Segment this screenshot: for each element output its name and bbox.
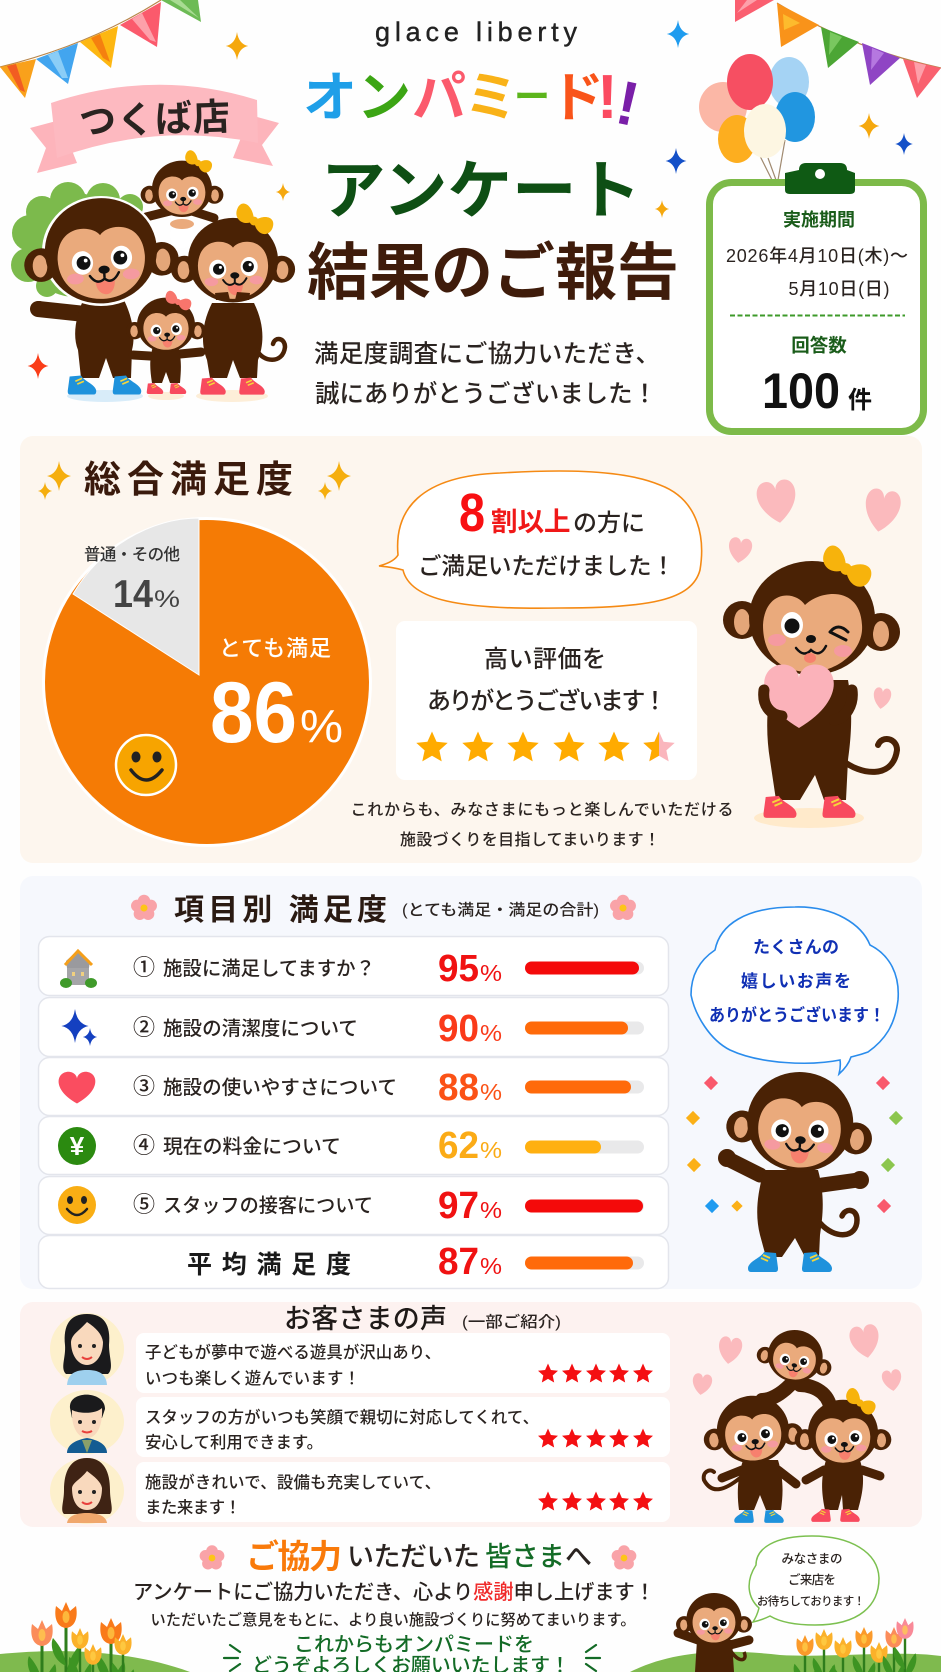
hearts xyxy=(727,478,903,710)
left monkey xyxy=(701,1392,805,1523)
row 4: % xyxy=(480,1137,502,1163)
review card 2: スタッフの方がいつも笑顔で親切に対応してくれて、 xyxy=(145,1408,539,1427)
footer closing xyxy=(252,1633,570,1672)
footer heading: ご協力 xyxy=(246,1538,342,1575)
speech bubble: welcome: お待ちしております！ xyxy=(757,1594,865,1608)
speech bubble: thanks xyxy=(691,907,898,1074)
closing message: 施設づくりを目指してまいります！ xyxy=(400,831,660,849)
icon: yen coin: ¥ xyxy=(70,1131,85,1161)
row 5: 97 xyxy=(438,1185,479,1227)
row 1: ① xyxy=(133,955,155,980)
monkeys: trio xyxy=(701,1323,891,1523)
footer heading: へ xyxy=(565,1542,592,1572)
review card 1 xyxy=(136,1333,670,1393)
footer note: いただいたご意見をもとに、より良い施設づくりに努めてまいります。 xyxy=(150,1611,636,1629)
row 5: % xyxy=(480,1197,502,1223)
review card 3: また来ます！ xyxy=(145,1499,241,1517)
row 3: 施設の使いやすさについて xyxy=(163,1077,397,1099)
bush xyxy=(11,182,143,297)
responses count: 件 xyxy=(848,387,872,414)
logo: オンパミード!! xyxy=(303,63,645,140)
label: other: 普通・その他 xyxy=(84,545,180,564)
monkey: top small xyxy=(141,149,223,248)
monkey: cheering with blue shoes xyxy=(718,1065,878,1272)
hearts xyxy=(691,1323,903,1396)
shadows xyxy=(67,390,143,402)
row 3: 88 xyxy=(438,1067,479,1109)
heading sparkles xyxy=(38,461,351,500)
logo: オンパミード!!: ー xyxy=(514,76,550,117)
row: average xyxy=(38,1236,668,1288)
card: thank you with stars xyxy=(396,621,697,780)
logo: オンパミード!!: ド xyxy=(550,68,604,128)
row 2: 90 xyxy=(438,1008,479,1050)
speech bubble: thanks: ありがとうございます！ xyxy=(709,1005,885,1025)
subtitle: 誠にありがとうございました！ xyxy=(315,379,657,408)
speech bubble: over 80% xyxy=(379,471,702,608)
closing message: これからも、みなさまにもっと楽しんでいただける xyxy=(350,801,734,819)
review card 2: 安心して利用できます。 xyxy=(145,1434,323,1452)
row 2: 施設の清潔度について xyxy=(163,1018,358,1040)
row 3: % xyxy=(480,1079,502,1105)
speech bubble: welcome: みなさまの xyxy=(782,1552,842,1566)
heading: お客さまの声 xyxy=(284,1304,447,1334)
monkey: winking with heart xyxy=(723,543,900,828)
balloons xyxy=(699,54,815,180)
speech bubble: welcome: ご来店を xyxy=(788,1572,836,1587)
responses label: 回答数 xyxy=(791,335,847,356)
speech bubble: over 80%: ご満足いただけました！ xyxy=(418,553,675,579)
footer heading: 皆さま xyxy=(485,1542,565,1572)
icon: smiley xyxy=(116,735,176,795)
review card 1: 子どもが夢中で遊べる遊具が沢山あり、 xyxy=(145,1343,441,1362)
panel: customer voices xyxy=(20,1302,922,1527)
row 3 xyxy=(38,1058,668,1116)
clip icon xyxy=(785,163,855,194)
review card 1: いつも楽しく遊んでいます！ xyxy=(145,1370,360,1388)
speech bubble: thanks: たくさんの xyxy=(753,938,839,957)
monkey family xyxy=(11,149,295,402)
row 4: ④ xyxy=(133,1133,155,1158)
tulips: left xyxy=(28,1602,134,1672)
row: average: % xyxy=(480,1253,502,1279)
value: 14%: 14 xyxy=(113,573,153,616)
value: 14%: % xyxy=(154,586,180,613)
speech bubble: over 80%: 8 xyxy=(459,483,485,543)
footer message: アンケートにご協力いただき、心より感謝申し上げます！ xyxy=(133,1580,655,1604)
stars xyxy=(538,1428,653,1447)
monkey: greeting xyxy=(676,1593,752,1672)
period dates: 2026年4月10日(木)～ xyxy=(726,246,908,266)
row 5 xyxy=(38,1176,668,1234)
review card 2 xyxy=(136,1397,670,1457)
confetti xyxy=(686,1076,903,1213)
row 1: 95 xyxy=(438,948,479,990)
icon: heart xyxy=(59,1072,95,1104)
row 5: スタッフの接客について xyxy=(163,1195,373,1217)
speech bubble: over 80%: の方に xyxy=(573,510,645,537)
row: average: 87 xyxy=(438,1241,479,1283)
avatar: woman 2 xyxy=(50,1458,124,1524)
review card 3 xyxy=(136,1462,670,1522)
subtitle: 満足度調査にご協力いただき、 xyxy=(314,340,660,368)
row 4: 62 xyxy=(438,1125,479,1167)
monkey: right with bow xyxy=(171,202,295,395)
speech bubble: welcome xyxy=(749,1536,879,1625)
speech bubble: over 80%: 割以上 xyxy=(491,507,570,537)
logo: オンパミード!!: パ xyxy=(412,68,466,128)
speech bubble: thanks: 嬉しいお声を xyxy=(741,971,851,991)
stars xyxy=(538,1492,653,1510)
value: 14% xyxy=(113,573,180,616)
subtitle xyxy=(314,340,660,408)
value: 86%: 86 xyxy=(210,665,297,761)
title line 2: 結果のご報告 xyxy=(307,239,679,308)
icon: yen coin xyxy=(58,1127,96,1165)
icon: smiley xyxy=(58,1186,96,1224)
panel: period and responses card xyxy=(710,163,924,432)
rating stars xyxy=(416,732,675,761)
row 5: ⑤ xyxy=(133,1192,155,1217)
period dates xyxy=(726,246,908,299)
row 2: ② xyxy=(133,1015,155,1040)
row 1: % xyxy=(480,960,502,986)
logo: オンパミード!!: オ xyxy=(303,68,357,128)
value: 86%: % xyxy=(300,700,343,752)
period label: 実施期間 xyxy=(783,210,855,230)
icon: house xyxy=(60,950,97,988)
footer closing: これからもオンパミードを xyxy=(294,1633,534,1656)
heading xyxy=(131,894,636,927)
decorative marks xyxy=(224,1645,600,1671)
closing message xyxy=(350,801,734,849)
label: very satisfied: とても満足 xyxy=(219,636,331,661)
icon: sparkle xyxy=(61,1009,97,1046)
heading xyxy=(284,1304,561,1334)
row 1: 施設に満足してますか？ xyxy=(163,958,375,980)
row 1 xyxy=(38,936,668,996)
card: thank you with stars: ありがとうございます！ xyxy=(427,687,667,715)
sparkles: header xyxy=(28,20,913,379)
tulips: right xyxy=(794,1618,916,1672)
row 2 xyxy=(38,998,668,1056)
monkey: large waving xyxy=(21,194,181,395)
footer heading: いただいた xyxy=(347,1542,480,1572)
responses count: 100 xyxy=(762,363,840,419)
footer heading xyxy=(200,1538,636,1575)
panel: satisfaction by item xyxy=(20,876,922,1289)
row 4 xyxy=(38,1116,668,1174)
avatar: man xyxy=(50,1390,124,1454)
period dates: 5月10日(日) xyxy=(788,279,890,299)
hills xyxy=(0,1651,941,1672)
heading: (一部ご紹介) xyxy=(462,1313,561,1331)
title line 1: アンケート xyxy=(321,155,641,227)
logo: オンパミード!!: ! xyxy=(597,63,618,132)
bunting: left xyxy=(0,0,201,98)
logo: オンパミード!!: ! xyxy=(610,68,645,140)
right monkey xyxy=(795,1386,891,1522)
review card 3: 施設がきれいで、設備も充実していて、 xyxy=(145,1473,441,1492)
row 3: ③ xyxy=(133,1074,155,1099)
row 2: % xyxy=(480,1020,502,1046)
pie chart xyxy=(44,518,370,846)
brand name: glace liberty xyxy=(375,17,578,47)
top monkey xyxy=(753,1323,838,1420)
stars xyxy=(538,1364,653,1382)
card: thank you with stars: 高い評価を xyxy=(484,646,606,673)
avatar: woman 1 xyxy=(50,1313,124,1385)
panel: overall satisfaction xyxy=(20,436,922,863)
heading: 総合満足度 xyxy=(84,459,300,500)
row: average: 平均満足度 xyxy=(187,1251,351,1279)
logo: オンパミード!!: ン xyxy=(357,68,411,128)
logo: オンパミード!!: ミ xyxy=(464,68,518,128)
heading: 項目別 満足度 xyxy=(174,894,387,927)
monkey: small front xyxy=(126,290,206,394)
ribbon: store name xyxy=(30,85,279,173)
bunting: right xyxy=(735,0,941,98)
store name text: つくば店 xyxy=(78,96,232,143)
row 4: 現在の料金について xyxy=(163,1136,341,1158)
heading: (とても満足・満足の合計) xyxy=(402,901,599,919)
